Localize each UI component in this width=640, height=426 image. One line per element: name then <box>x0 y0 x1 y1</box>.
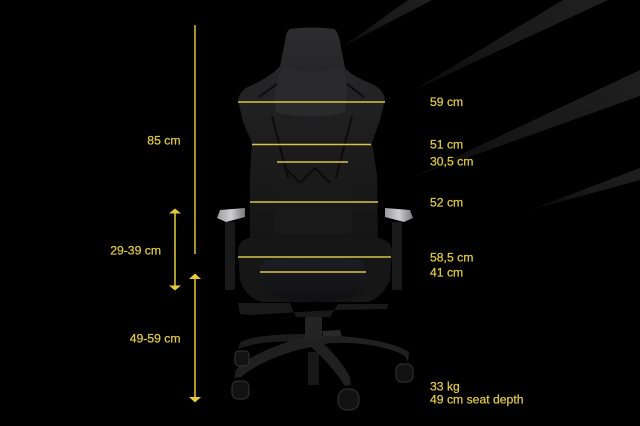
left labels: 29-39 cm <box>110 244 161 258</box>
lumbar pillow <box>274 183 352 235</box>
measurement lines on chair <box>238 102 391 272</box>
right labels: 52 cm <box>430 196 463 210</box>
seat cushion <box>238 238 392 302</box>
arrow: seat height <box>189 274 201 402</box>
left labels: 85 cm <box>147 134 180 148</box>
right labels <box>430 95 524 406</box>
right labels: 49 cm seat depth <box>430 392 524 406</box>
left labels: 49-59 cm <box>130 332 180 346</box>
arrow: armrest height <box>169 208 181 290</box>
neck pillow <box>274 66 346 116</box>
background light rays <box>342 0 640 210</box>
chair illustration <box>217 28 413 410</box>
armrests <box>217 208 413 290</box>
right labels: 41 cm <box>430 266 463 280</box>
backrest and headrest <box>238 28 385 245</box>
strap openings and stripes <box>259 84 364 183</box>
right labels: 33 kg <box>430 380 460 394</box>
left labels <box>110 134 180 346</box>
right labels: 58,5 cm <box>430 250 473 264</box>
right labels: 59 cm <box>430 95 463 109</box>
right labels: 51 cm <box>430 138 463 152</box>
height line: 85 cm <box>194 25 196 254</box>
chair base <box>232 317 413 410</box>
right labels: 30,5 cm <box>430 154 473 168</box>
casters <box>232 351 413 410</box>
seat mechanism <box>238 303 388 317</box>
